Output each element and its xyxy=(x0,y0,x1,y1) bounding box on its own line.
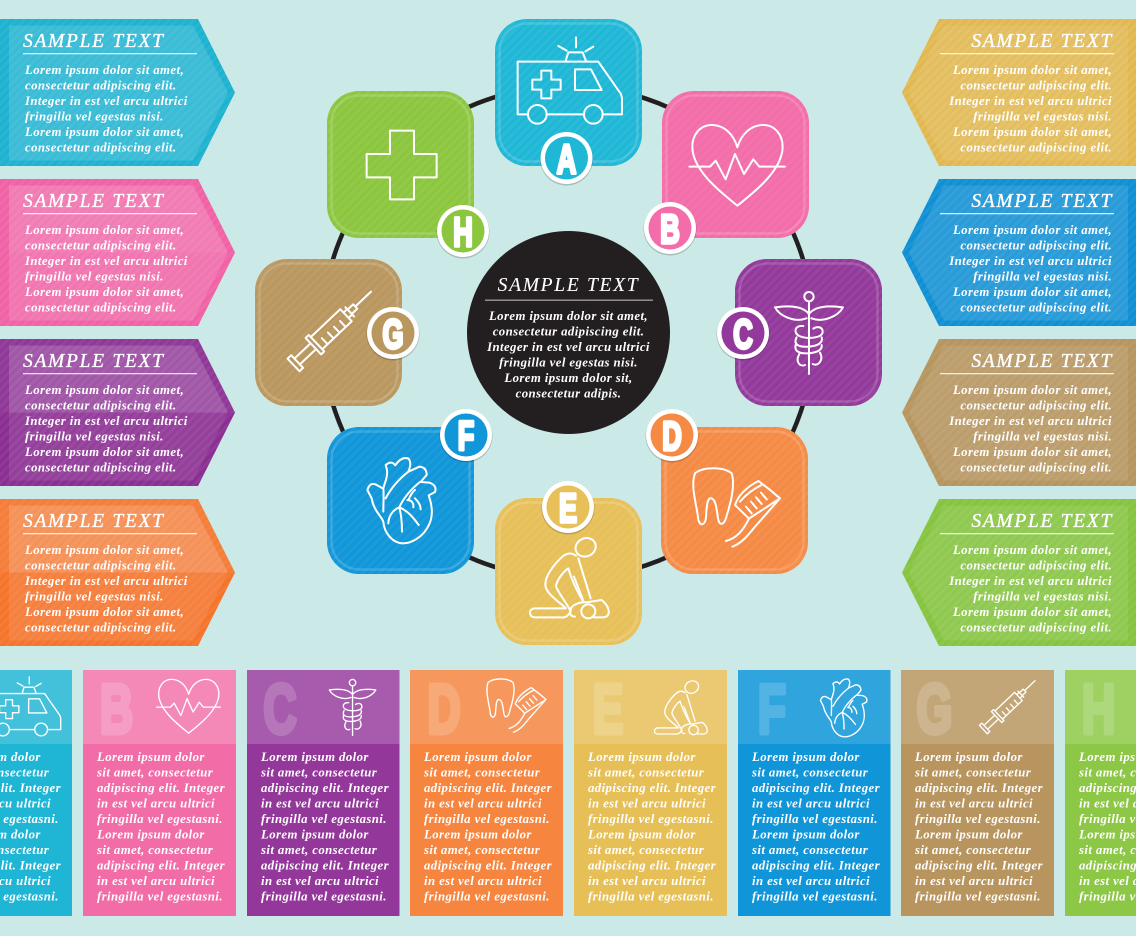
bottom card D xyxy=(410,669,563,916)
arrow panel right: green: Lorem ipsum dolor sit amet, xyxy=(952,605,1112,619)
arrow panel right: tan: consectetur adipiscing elit. xyxy=(960,460,1112,474)
ghost letter G: G xyxy=(917,669,952,748)
arrow panel left: pink xyxy=(0,179,235,326)
ghost letter C: C xyxy=(263,669,297,748)
arrow panel left: pink: consectetur adipiscing elit. xyxy=(25,238,177,252)
arrow panel right: tan: Lorem ipsum dolor sit amet, xyxy=(952,383,1112,397)
arrow panel right: tan: Lorem ipsum dolor sit amet, xyxy=(952,445,1112,459)
card D text: in est vel arcu ultrici xyxy=(424,874,542,888)
ghost letter B: B xyxy=(100,669,133,748)
card E text: fringilla vel egestasni. xyxy=(588,890,714,904)
card F text: in est vel arcu ultrici xyxy=(752,796,870,810)
arrow panel left: orange: Lorem ipsum dolor sit amet, xyxy=(24,605,184,619)
arrow panel right: yellow: fringilla vel egestas nisi. xyxy=(973,110,1112,124)
arrow panel left: pink: Lorem ipsum dolor sit amet, xyxy=(24,285,184,299)
card C text: fringilla vel egestasni. xyxy=(261,812,387,826)
card C text: in est vel arcu ultrici xyxy=(261,796,379,810)
badge G: G xyxy=(382,313,404,357)
bottom card F xyxy=(738,669,890,916)
arrow panel left: purple: consectetur adipiscing elit. xyxy=(25,460,177,474)
card G text: adipiscing elit. Integer xyxy=(915,781,1044,795)
center circle panel: consectetur adipiscing elit. xyxy=(493,324,644,338)
icon: heart with pulse line xyxy=(689,125,785,206)
card F text: fringilla vel egestasni. xyxy=(752,890,878,904)
arrow panel right: tan: SAMPLE TEXT xyxy=(971,351,1113,372)
arrow panel left: purple: fringilla vel egestas nisi. xyxy=(25,430,164,444)
card E text: sit amet, consectetur xyxy=(587,843,705,857)
badge B: B xyxy=(660,208,680,252)
card E text: Lorem ipsum dolor xyxy=(587,828,696,842)
center circle panel: Lorem ipsum dolor sit, xyxy=(503,371,633,385)
badge B xyxy=(644,202,696,256)
card F text: Lorem ipsum dolor xyxy=(751,828,860,842)
arrow panel right: blue: Lorem ipsum dolor sit amet, xyxy=(952,285,1112,299)
icon: person giving CPR xyxy=(530,535,609,618)
card F text: fringilla vel egestasni. xyxy=(752,812,878,826)
card B text: sit amet, consectetur xyxy=(96,843,214,857)
card G text: sit amet, consectetur xyxy=(914,766,1032,780)
arrow panel right: green: consectetur adipiscing elit. xyxy=(960,558,1112,572)
bottom card H xyxy=(1065,669,1136,916)
icon: ambulance small xyxy=(0,677,61,736)
arrow panel right: yellow: Integer in est vel arcu ultrici xyxy=(948,94,1112,108)
card F text: adipiscing elit. Integer xyxy=(752,858,881,872)
card G text: fringilla vel egestasni. xyxy=(915,890,1041,904)
arrow panel left: pink: Lorem ipsum dolor sit amet, xyxy=(24,223,184,237)
arrow panel left: pink: fringilla vel egestas nisi. xyxy=(25,270,164,284)
tile B: heartbeat xyxy=(662,91,809,238)
card G text: adipiscing elit. Integer xyxy=(915,858,1044,872)
arrow panel right: yellow xyxy=(902,19,1136,166)
card D text: Lorem ipsum dolor xyxy=(423,828,532,842)
center circle panel: Integer in est vel arcu ultrici xyxy=(486,340,650,354)
card C text: in est vel arcu ultrici xyxy=(261,874,379,888)
card E text: sit amet, consectetur xyxy=(587,766,705,780)
tile F: anatomical heart xyxy=(327,427,474,574)
badge C: C xyxy=(733,313,753,357)
icon: CPR small xyxy=(654,679,707,735)
card G text: in est vel arcu ultrici xyxy=(915,796,1033,810)
card E text: adipiscing elit. Integer xyxy=(588,781,717,795)
center circle panel xyxy=(467,231,670,434)
card F text: sit amet, consectetur xyxy=(751,843,869,857)
arrow panel left: orange: SAMPLE TEXT xyxy=(23,511,165,532)
card C text: adipiscing elit. Integer xyxy=(261,858,390,872)
card B text: adipiscing elit. Integer xyxy=(97,781,226,795)
arrow panel right: green: Integer in est vel arcu ultrici xyxy=(948,574,1112,588)
card D text: adipiscing elit. Integer xyxy=(424,858,553,872)
arrow panel right: green: SAMPLE TEXT xyxy=(971,511,1113,532)
arrow panel right: green: consectetur adipiscing elit. xyxy=(960,620,1112,634)
tile D: tooth and brush xyxy=(661,427,808,574)
card C text: sit amet, consectetur xyxy=(260,766,378,780)
arrow panel right: green: fringilla vel egestas nisi. xyxy=(973,590,1112,604)
arrow panel right: yellow: consectetur adipiscing elit. xyxy=(960,78,1112,92)
card B text: in est vel arcu ultrici xyxy=(97,874,215,888)
arrow panel right: blue: consectetur adipiscing elit. xyxy=(960,300,1112,314)
card E text: in est vel arcu ultrici xyxy=(588,874,706,888)
arrow panel left: cyan: Integer in est vel arcu ultrici xyxy=(24,94,188,108)
card F text: in est vel arcu ultrici xyxy=(752,874,870,888)
arrow panel right: tan: consectetur adipiscing elit. xyxy=(960,398,1112,412)
card E text: adipiscing elit. Integer xyxy=(588,858,717,872)
arrow panel right: green xyxy=(902,499,1136,646)
badge F: F xyxy=(458,415,474,459)
arrow panel left: purple: SAMPLE TEXT xyxy=(23,351,165,372)
card C text: sit amet, consectetur xyxy=(260,843,378,857)
badge D xyxy=(646,409,698,462)
arrow panel right: blue: Lorem ipsum dolor sit amet, xyxy=(952,223,1112,237)
badge A: A xyxy=(557,138,576,182)
badge H: H xyxy=(453,211,473,255)
ghost letter E: E xyxy=(593,669,623,748)
arrow panel left: cyan xyxy=(0,19,235,166)
card B text: Lorem ipsum dolor xyxy=(96,750,205,764)
arrow panel left: orange: Lorem ipsum dolor sit amet, xyxy=(24,543,184,557)
tile G: syringe xyxy=(255,259,402,406)
center circle panel: consectetur adipis. xyxy=(516,386,621,400)
card E text: in est vel arcu ultrici xyxy=(588,796,706,810)
badge H xyxy=(436,205,490,258)
arrow panel left: purple: consectetur adipiscing elit. xyxy=(25,398,177,412)
tile A: ambulance xyxy=(495,19,642,166)
center circle panel: SAMPLE TEXT xyxy=(498,275,639,296)
arrow panel right: blue: consectetur adipiscing elit. xyxy=(960,238,1112,252)
center circle panel: Lorem ipsum dolor sit amet, xyxy=(488,309,648,323)
arrow panel left: orange: fringilla vel egestas nisi. xyxy=(25,590,164,604)
arrow panel left: purple xyxy=(0,339,235,486)
card B text: sit amet, consectetur xyxy=(96,766,214,780)
ghost letter F: F xyxy=(758,669,786,748)
badge F xyxy=(440,409,492,462)
tile E: CPR xyxy=(495,498,642,645)
card B text: fringilla vel egestasni. xyxy=(97,812,223,826)
arrow panel left: orange: Integer in est vel arcu ultrici xyxy=(24,574,188,588)
ghost letter D: D xyxy=(427,669,461,748)
arrow panel left: cyan: Lorem ipsum dolor sit amet, xyxy=(24,63,184,77)
card G text: Lorem ipsum dolor xyxy=(914,750,1023,764)
card D text: in est vel arcu ultrici xyxy=(424,796,542,810)
badge E xyxy=(542,481,594,534)
card F text: sit amet, consectetur xyxy=(751,766,869,780)
arrow panel right: yellow: SAMPLE TEXT xyxy=(971,31,1113,52)
bottom card B xyxy=(83,669,236,916)
card C text: fringilla vel egestasni. xyxy=(261,890,387,904)
bottom card G xyxy=(901,669,1054,916)
bottom card A xyxy=(0,670,72,916)
card D text: Lorem ipsum dolor xyxy=(423,750,532,764)
arrow panel right: blue xyxy=(902,179,1136,326)
card E text: fringilla vel egestasni. xyxy=(588,812,714,826)
arrow panel left: orange xyxy=(0,499,235,646)
card B text: adipiscing elit. Integer xyxy=(97,858,226,872)
card G text: Lorem ipsum dolor xyxy=(914,828,1023,842)
icon: caduceus xyxy=(775,292,843,374)
tile H: medical cross xyxy=(327,91,474,238)
arrow panel right: tan: Integer in est vel arcu ultrici xyxy=(948,414,1112,428)
arrow panel left: orange: consectetur adipiscing elit. xyxy=(25,620,177,634)
arrow panel right: tan xyxy=(902,339,1136,486)
icon: anatomical heart small xyxy=(820,679,867,737)
card G text: fringilla vel egestasni. xyxy=(915,812,1041,826)
bottom card E xyxy=(574,669,727,916)
icon: ambulance xyxy=(518,37,622,124)
arrow panel left: cyan: fringilla vel egestas nisi. xyxy=(25,110,164,124)
ghost letter H: H xyxy=(1082,669,1115,748)
card B text: in est vel arcu ultrici xyxy=(97,796,215,810)
icon: caduceus small xyxy=(329,679,376,736)
arrow panel left: purple: Lorem ipsum dolor sit amet, xyxy=(24,383,184,397)
arrow panel left: cyan: Lorem ipsum dolor sit amet, xyxy=(24,125,184,139)
tile C: caduceus xyxy=(735,259,882,406)
badge G xyxy=(366,307,420,360)
arrow panel left: cyan: SAMPLE TEXT xyxy=(23,31,165,52)
badge C xyxy=(716,307,770,360)
card B text: fringilla vel egestasni. xyxy=(97,890,223,904)
card D text: sit amet, consectetur xyxy=(423,843,541,857)
badge D: D xyxy=(662,415,682,459)
arrow panel right: blue: Integer in est vel arcu ultrici xyxy=(948,254,1112,268)
card C text: Lorem ipsum dolor xyxy=(260,750,369,764)
arrow panel left: pink: SAMPLE TEXT xyxy=(23,191,165,212)
center circle panel: fringilla vel egestas nisi. xyxy=(499,356,638,370)
arrow panel right: blue: fringilla vel egestas nisi. xyxy=(973,270,1112,284)
arrow panel left: cyan: consectetur adipiscing elit. xyxy=(25,140,177,154)
bottom card C xyxy=(247,669,400,916)
card E text: Lorem ipsum dolor xyxy=(587,750,696,764)
card G text: in est vel arcu ultrici xyxy=(915,874,1033,888)
icon: syringe small xyxy=(978,675,1040,735)
arrow panel right: tan: fringilla vel egestas nisi. xyxy=(973,430,1112,444)
arrow panel left: purple: Lorem ipsum dolor sit amet, xyxy=(24,445,184,459)
arrow panel left: orange: consectetur adipiscing elit. xyxy=(25,558,177,572)
arrow panel right: yellow: Lorem ipsum dolor sit amet, xyxy=(952,125,1112,139)
card C text: adipiscing elit. Integer xyxy=(261,781,390,795)
badge A xyxy=(540,132,593,186)
icon: anatomical heart xyxy=(367,458,436,543)
arrow panel left: pink: Integer in est vel arcu ultrici xyxy=(24,254,188,268)
card D text: adipiscing elit. Integer xyxy=(424,781,553,795)
card B text: Lorem ipsum dolor xyxy=(96,828,205,842)
card D text: sit amet, consectetur xyxy=(423,766,541,780)
icon: heart small xyxy=(157,679,220,733)
card F text: Lorem ipsum dolor xyxy=(751,750,860,764)
card D text: fringilla vel egestasni. xyxy=(424,890,550,904)
card F text: adipiscing elit. Integer xyxy=(752,781,881,795)
arrow panel left: cyan: consectetur adipiscing elit. xyxy=(25,78,177,92)
arrow panel right: blue: SAMPLE TEXT xyxy=(971,191,1113,212)
arrow panel right: green: Lorem ipsum dolor sit amet, xyxy=(952,543,1112,557)
icon: tooth and toothbrush xyxy=(693,468,780,547)
card G text: sit amet, consectetur xyxy=(914,843,1032,857)
icon: syringe xyxy=(286,283,379,373)
icon: medical cross xyxy=(367,131,437,199)
arrow panel right: yellow: consectetur adipiscing elit. xyxy=(960,140,1112,154)
connecting ring xyxy=(322,86,814,578)
arrow panel left: purple: Integer in est vel arcu ultrici xyxy=(24,414,188,428)
icon: tooth small xyxy=(487,679,546,732)
badge E: E xyxy=(559,487,577,531)
arrow panel left: pink: consectetur adipiscing elit. xyxy=(25,300,177,314)
arrow panel right: yellow: Lorem ipsum dolor sit amet, xyxy=(952,63,1112,77)
card C text: Lorem ipsum dolor xyxy=(260,828,369,842)
card D text: fringilla vel egestasni. xyxy=(424,812,550,826)
